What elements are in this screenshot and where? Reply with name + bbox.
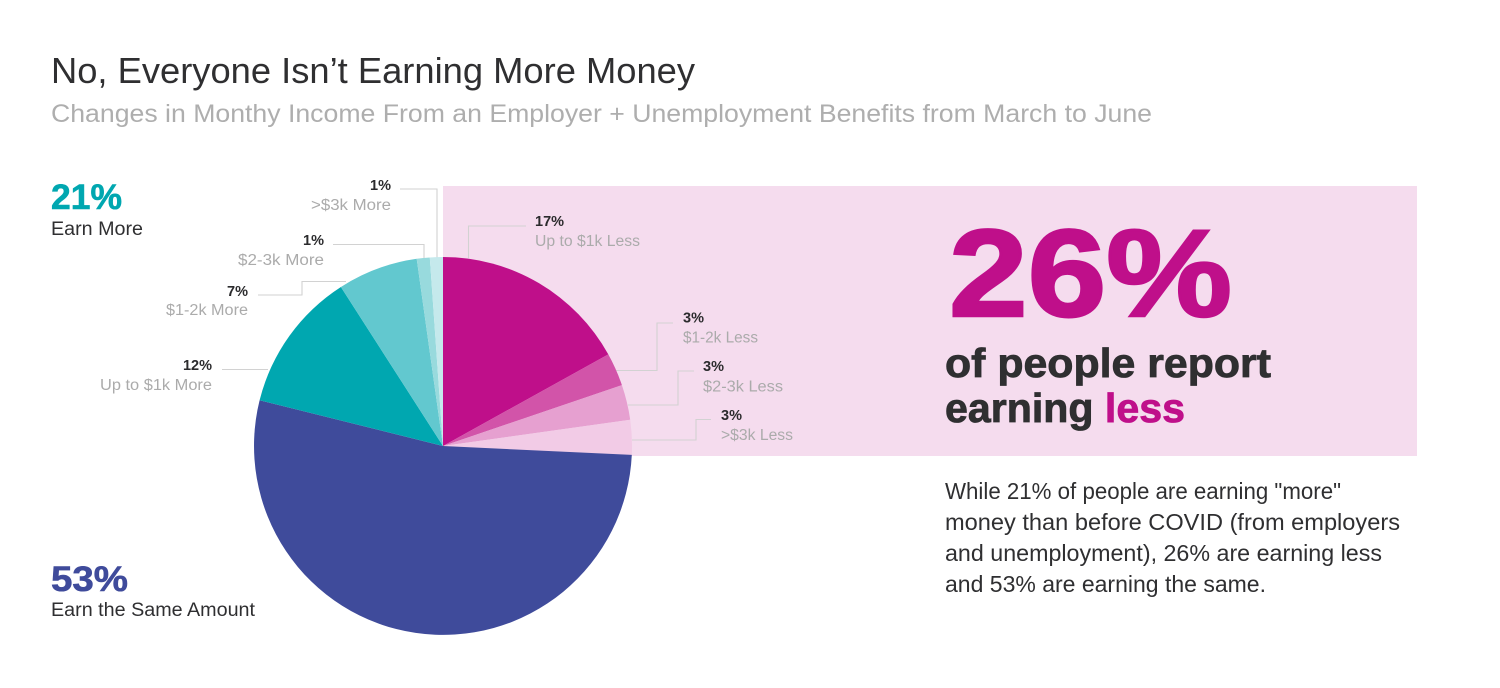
slice: 7% $1-2k more [341, 259, 443, 446]
label: 1% $2-3k more [238, 233, 324, 269]
title: No, Everyone Isn’t Earning More Money [51, 50, 695, 91]
pie chart [254, 257, 632, 635]
leader lines [222, 189, 711, 440]
callout: 21% earn more: Earn More [51, 219, 143, 240]
label: 17% up to $1k less: 17% [535, 214, 564, 230]
label: 1% >$3k more: 1% [370, 178, 391, 194]
slice: 3% $2-3k less [443, 385, 630, 446]
headline: of people report earning less: earning less [945, 385, 1185, 431]
panel: pink highlight [443, 186, 1417, 456]
label: 7% $1-2k more: $1-2k More [166, 302, 248, 319]
headline: of people report earning less: of people report [945, 340, 1271, 386]
text block: explanation: While 21% of people are earning "more" [945, 478, 1341, 504]
label: 12% up to $1k more: Up to $1k More [100, 377, 212, 394]
slice: 17% up to $1k less [443, 257, 608, 446]
label: 3% >$3k less: >$3k Less [721, 427, 793, 444]
label: 3% $2-3k less: 3% [703, 359, 724, 375]
text block: explanation: and 53% are earning the same. [945, 571, 1266, 597]
label: 1% >$3k more [311, 178, 391, 214]
label: 7% $1-2k more [166, 284, 248, 319]
text block: explanation: money than before COVID (from employers [945, 509, 1400, 535]
callout: 53% same: 53% [51, 560, 128, 599]
label: 3% $2-3k less: $2-3k Less [703, 378, 783, 396]
label: 17% up to $1k less: Up to $1k Less [535, 233, 640, 250]
label: 3% >$3k less [721, 408, 793, 444]
label: 3% >$3k less: 3% [721, 408, 742, 424]
subtitle: Changes in Monthy Income From an Employer + Unemployment Benefits from March to June [51, 100, 1152, 128]
slice: 1% $2-3k more [417, 258, 443, 446]
label: 3% $1-2k less: 3% [683, 310, 704, 326]
slice: 3% >$3k less [443, 420, 632, 455]
label: 3% $1-2k less [683, 310, 758, 346]
callout: 53% same [51, 560, 256, 621]
callout: 53% same: Earn the Same Amount [51, 600, 256, 621]
headline: of people report earning less [945, 340, 1271, 431]
label: 7% $1-2k more: 7% [227, 284, 248, 300]
big number: 26%: 26% [949, 205, 1232, 343]
label: 12% up to $1k more [100, 358, 212, 394]
slice: 12% up to $1k more [260, 287, 443, 446]
label: 12% up to $1k more: 12% [183, 358, 212, 374]
callout: 21% earn more: 21% [51, 178, 122, 217]
slice: 3% $1-2k less [443, 354, 622, 446]
label: 3% $2-3k less [703, 359, 783, 396]
slice: 53% same [254, 400, 632, 635]
callout: 21% earn more [51, 178, 143, 240]
text block: explanation: and unemployment), 26% are earning less [945, 540, 1382, 566]
label: 3% $1-2k less: $1-2k Less [683, 330, 758, 346]
slice: 1% >$3k more [430, 257, 443, 446]
label: 1% $2-3k more: $2-3k More [238, 252, 324, 269]
label: 1% >$3k more: >$3k More [311, 197, 391, 214]
label: 1% $2-3k more: 1% [303, 233, 324, 249]
text block: explanation [945, 478, 1400, 597]
label: 17% up to $1k less [535, 214, 640, 250]
